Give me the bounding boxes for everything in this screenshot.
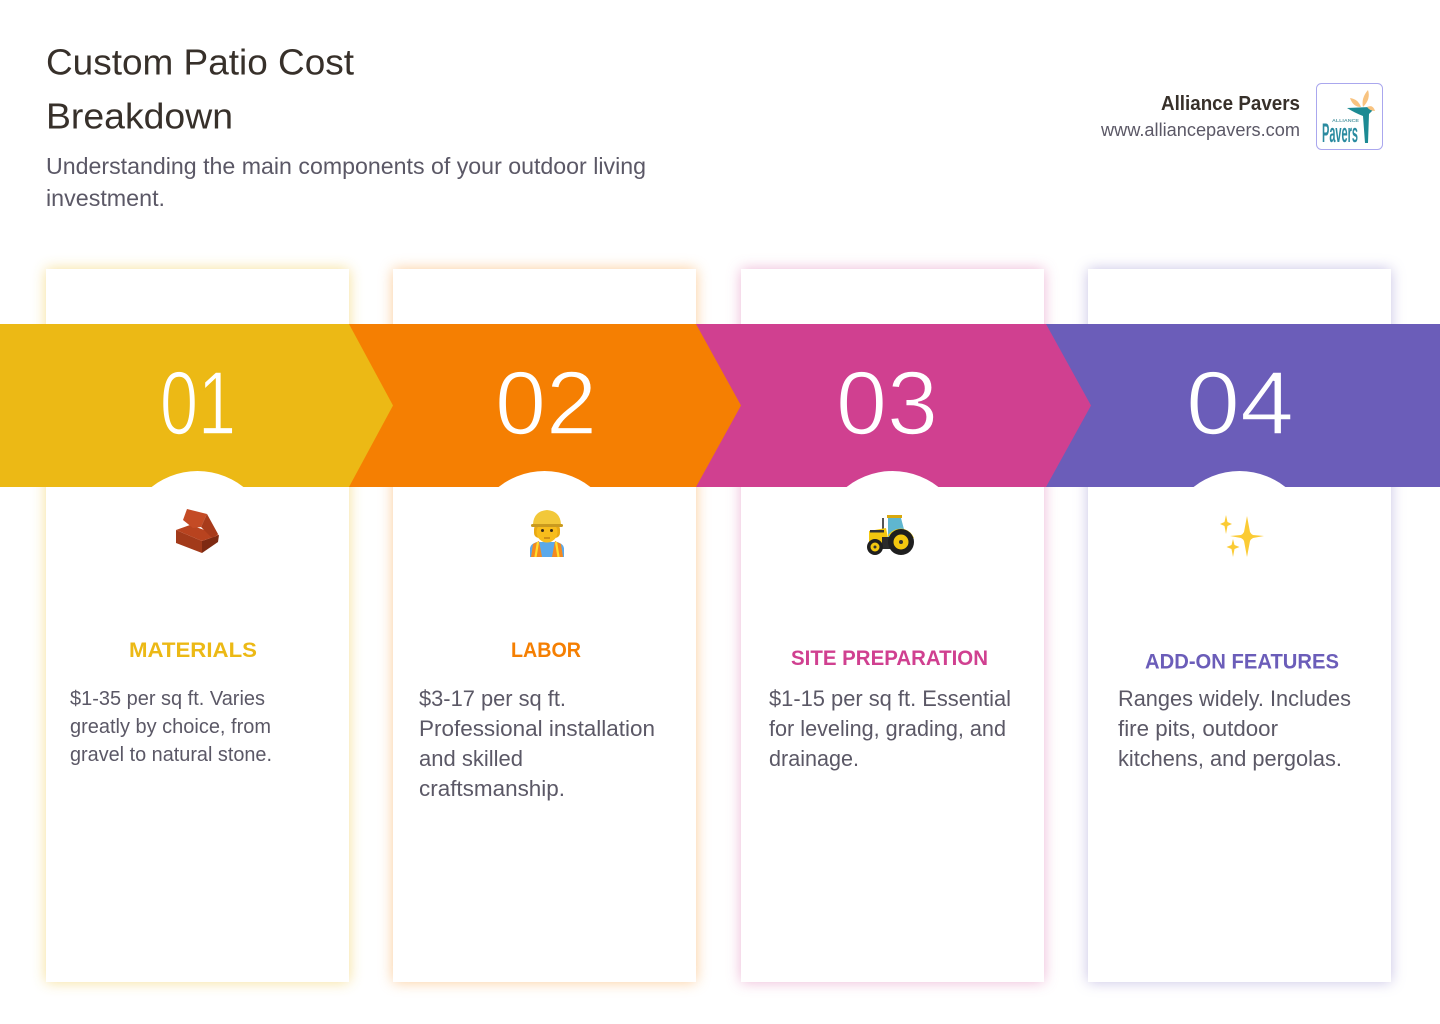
text: labor description: and skilled <box>419 746 523 771</box>
arrow: step 02 band <box>349 324 741 487</box>
company name and website: www.alliancepavers.com <box>1100 120 1300 140</box>
text: add-on features description: kitchens, and pergolas. <box>1118 746 1342 771</box>
text: add-on features description: fire pits, outdoor <box>1118 716 1278 741</box>
step number 02: 02 <box>495 354 597 454</box>
title <box>46 42 354 136</box>
text: materials description: gravel to natural stone. <box>70 744 272 766</box>
icon: company logo: Pavers <box>1322 118 1358 148</box>
icon: company logo <box>1316 84 1382 150</box>
text: site preparation description: for leveling, grading, and <box>769 716 1006 741</box>
icon: construction worker <box>530 510 564 557</box>
text: site preparation description: drainage. <box>769 746 859 771</box>
arrow: step 01 band <box>0 324 393 487</box>
heading: add-on features: ADD-ON FEATURES <box>1145 650 1339 674</box>
step number 03: 03 <box>836 354 938 454</box>
subtitle <box>46 153 646 211</box>
text: labor description: craftsmanship. <box>419 776 565 801</box>
icon: sparkles <box>1220 515 1264 557</box>
icon: company logo: ALLIANCE <box>1332 118 1359 123</box>
step number 01: 01 <box>160 354 236 454</box>
text: site preparation description: $1-15 per sq ft. Essential <box>769 686 1011 711</box>
arrow: step 04 band <box>1046 324 1440 487</box>
subtitle: Understanding the main components of your outdoor living <box>46 153 646 179</box>
company name and website: Alliance Pavers <box>1161 93 1300 115</box>
title: Custom Patio Cost <box>46 42 354 82</box>
text: add-on features description <box>1118 686 1351 771</box>
heading: materials: MATERIALS <box>129 638 257 662</box>
company name and website <box>1100 93 1300 140</box>
text: materials description: greatly by choice, from <box>70 716 271 738</box>
heading: labor: LABOR <box>511 638 581 662</box>
text: materials description <box>70 688 272 766</box>
text: labor description: Professional installation <box>419 716 655 741</box>
text: labor description <box>419 686 655 801</box>
text: add-on features description: Ranges widely. Includes <box>1118 686 1351 711</box>
panel: labor card <box>393 269 696 982</box>
panel: add-on features card <box>1088 269 1391 982</box>
heading: site preparation: SITE PREPARATION <box>791 646 988 670</box>
text: labor description: $3-17 per sq ft. <box>419 686 566 711</box>
arrow: step 03 band <box>696 324 1091 487</box>
subtitle: investment. <box>46 185 165 211</box>
icon: bricks <box>176 509 219 553</box>
panel: materials card <box>46 269 349 982</box>
text: materials description: $1-35 per sq ft. Varies <box>70 688 265 710</box>
title: Breakdown <box>46 96 233 136</box>
icon holder circles <box>126 471 1312 611</box>
step number 04: 04 <box>1186 354 1294 454</box>
text: site preparation description <box>769 686 1011 771</box>
icon: tractor <box>867 515 914 555</box>
panel: site preparation card <box>741 269 1044 982</box>
